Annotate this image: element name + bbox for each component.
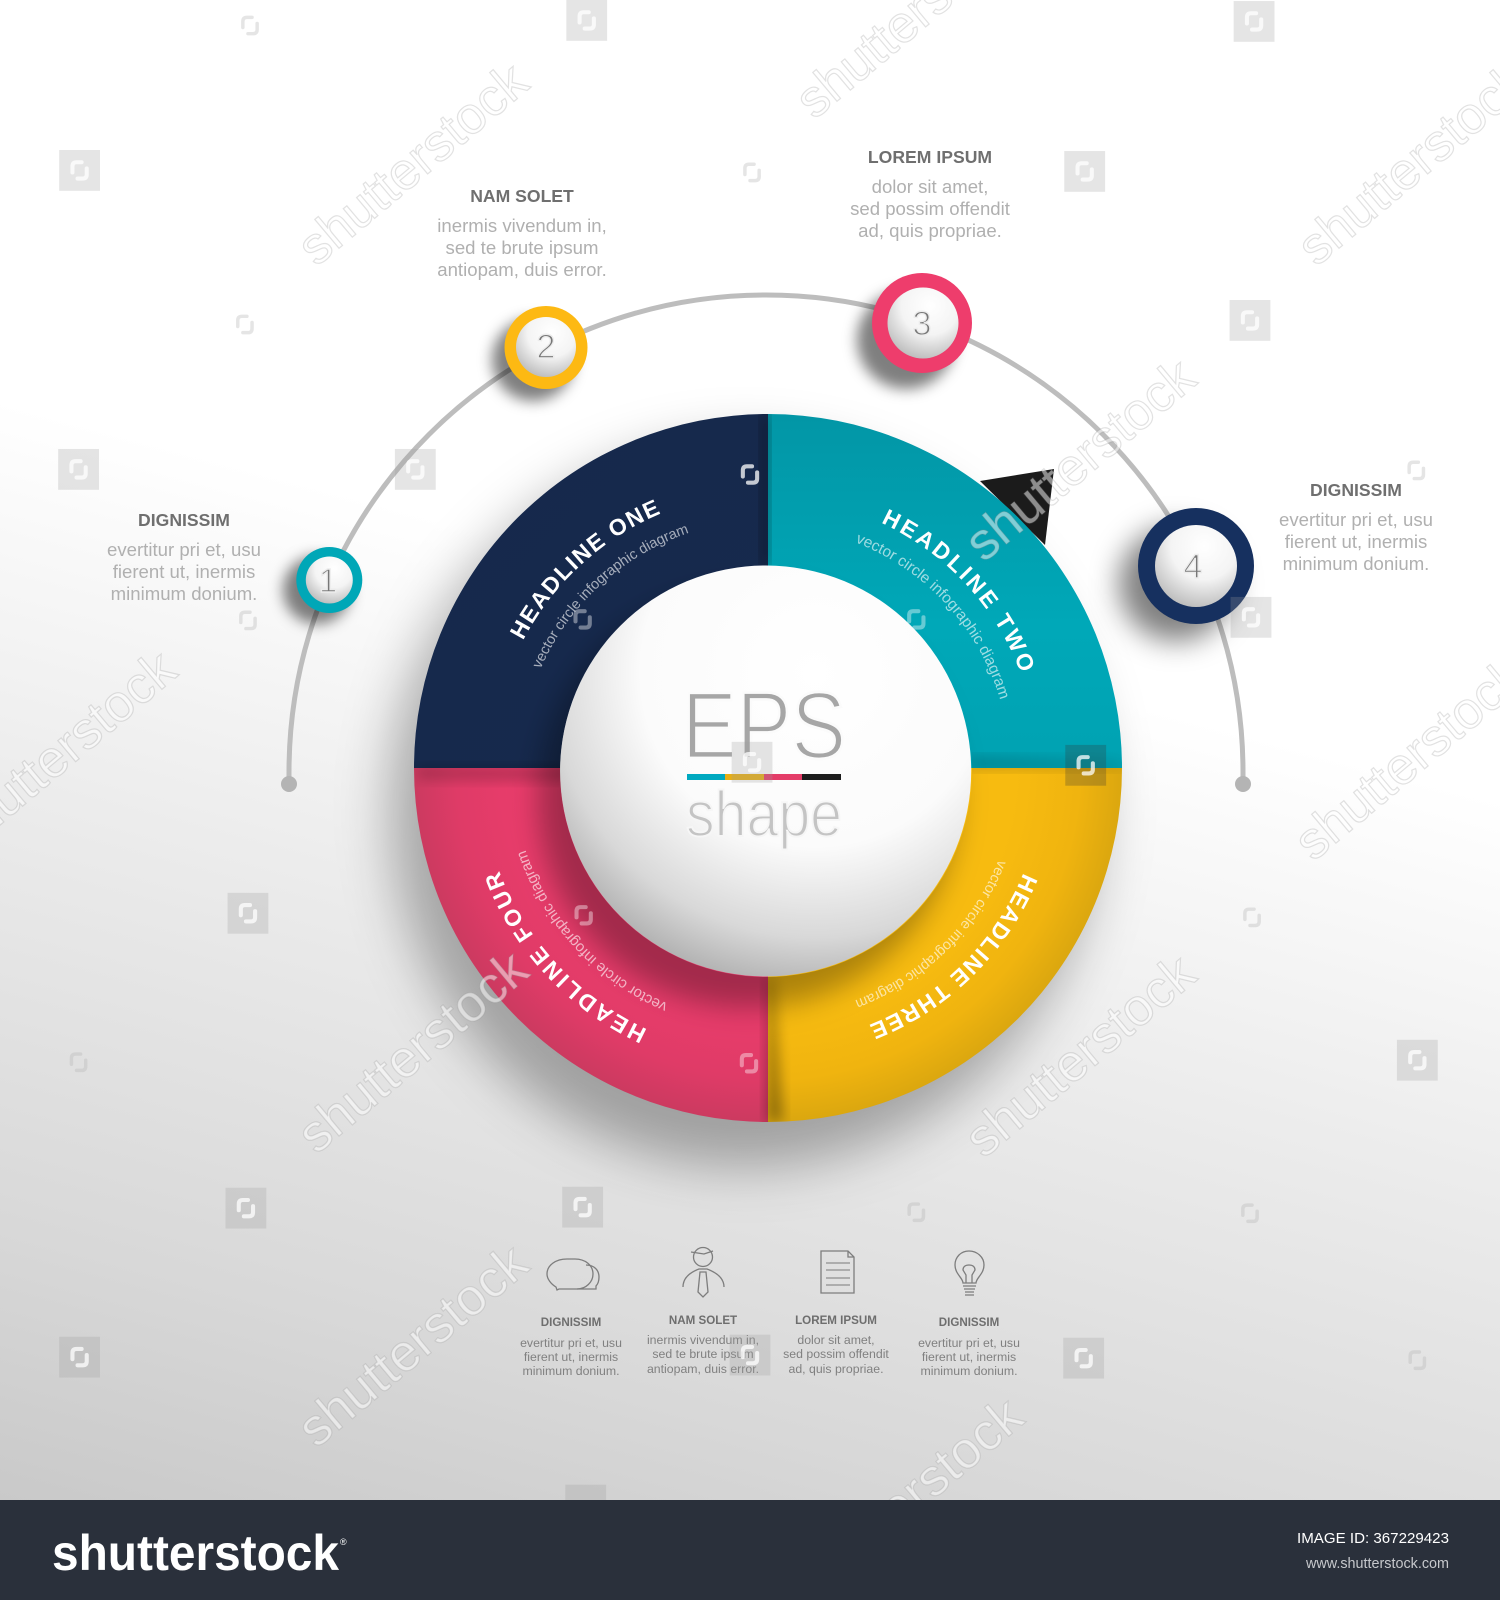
bottom column: person <box>647 1248 759 1376</box>
marker 3 with label: LOREM IPSUM <box>868 147 992 167</box>
marker 1 with label <box>107 510 362 624</box>
bottom column: document: dolor sit amet, <box>797 1333 875 1347</box>
marker 4 with label: evertitur pri et, usu <box>1279 509 1433 530</box>
marker 1 with label: DIGNISSIM <box>138 510 230 530</box>
bottom column: chat: evertitur pri et, usu <box>520 1336 622 1350</box>
icon: person with tie <box>683 1248 724 1297</box>
marker 3 with label: 3 <box>913 305 931 343</box>
footer registered mark: ® <box>340 1537 347 1547</box>
icon: black pointer behind ring <box>980 469 1054 545</box>
headline two: HEADLINE TWO <box>882 509 1034 670</box>
bottom column: idea: fierent ut, inermis <box>922 1350 1016 1364</box>
bottom column: chat: fierent ut, inermis <box>524 1350 618 1364</box>
bottom column: person: antiopam, duis error. <box>647 1362 759 1376</box>
watermark overlay: shutterstock <box>954 943 1207 1168</box>
marker 3 with label <box>850 147 1011 389</box>
watermark overlay: shutterstock <box>954 347 1207 572</box>
marker 4 with label: fierent ut, inermis <box>1285 531 1427 552</box>
bottom column: chat: minimum donium. <box>522 1364 620 1378</box>
marker 2 with label: inermis vivendum in, <box>437 215 607 236</box>
marker 2 with label: sed te brute ipsum <box>446 237 598 258</box>
marker 2 with label: 2 <box>537 328 555 366</box>
bottom column: document: sed possim offendit <box>783 1347 889 1361</box>
headline one: HEADLINE ONE <box>510 500 660 640</box>
segment: teal <box>768 414 1122 768</box>
marker 1 with label: evertitur pri et, usu <box>107 539 261 560</box>
bottom column: document: LOREM IPSUM <box>795 1314 877 1327</box>
icon: speech bubbles <box>547 1259 599 1290</box>
center sphere with EPS shape title <box>560 566 971 976</box>
icon: document <box>821 1251 854 1293</box>
segment: yellow <box>768 768 1122 1122</box>
bottom column: chat <box>520 1259 622 1378</box>
marker 1 with label: 1 <box>319 562 337 599</box>
headline three: vector circle infographic diagram <box>856 862 1006 1007</box>
marker 3 with label: ad, quis propriae. <box>858 220 1002 241</box>
bottom column: person: sed te brute ipsum <box>652 1347 754 1361</box>
bottom column: chat: DIGNISSIM <box>541 1316 601 1329</box>
timeline arc with end dots <box>281 295 1251 792</box>
marker 2 with label: antiopam, duis error. <box>437 259 607 280</box>
color bar <box>687 774 841 780</box>
footer bar <box>0 1500 1500 1600</box>
marker 3 with label: dolor sit amet, <box>872 176 988 197</box>
segment seam shadows <box>414 414 1122 1122</box>
footer image id: IMAGE ID: 367229423 <box>1297 1530 1449 1547</box>
marker 4 with label <box>1119 480 1433 641</box>
bottom column: person: NAM SOLET <box>669 1314 737 1327</box>
bottom column: idea: DIGNISSIM <box>939 1316 999 1329</box>
title: EPS: EPS <box>682 673 846 779</box>
footer url: www.shutterstock.com <box>1305 1555 1449 1572</box>
bottom column: document: ad, quis propriae. <box>788 1362 884 1376</box>
ring drop shadow <box>390 443 1100 1167</box>
headline two: vector circle infographic diagram <box>858 534 1008 699</box>
headline four: HEADLINE FOUR <box>486 871 646 1044</box>
bottom column: document <box>783 1251 889 1376</box>
marker 4 with label: DIGNISSIM <box>1310 480 1402 500</box>
title: shape: shape <box>686 778 842 850</box>
icon: light bulb <box>955 1251 984 1295</box>
bottom column: idea: minimum donium. <box>920 1364 1018 1378</box>
segment: navy <box>414 414 768 768</box>
marker 4 with label: minimum donium. <box>1283 553 1429 574</box>
footer logo: shutterstock <box>52 1525 339 1581</box>
marker 2 with label: NAM SOLET <box>470 186 574 206</box>
marker 4 with label: 4 <box>1184 548 1202 586</box>
bottom column: idea <box>918 1251 1020 1378</box>
segment: pink <box>414 768 768 1122</box>
bottom column: idea: evertitur pri et, usu <box>918 1336 1020 1350</box>
marker 3 with label: sed possim offendit <box>850 198 1011 219</box>
watermark overlay: shutterstock <box>287 939 540 1164</box>
headline three: HEADLINE THREE <box>870 874 1038 1040</box>
marker 2 with label <box>437 186 607 401</box>
marker 1 with label: fierent ut, inermis <box>113 561 255 582</box>
marker 1 with label: minimum donium. <box>111 583 257 604</box>
watermark overlay: shutterstock <box>287 1233 540 1458</box>
bottom column: person: inermis vivendum in, <box>647 1333 759 1347</box>
watermark overlay: shutterstock <box>287 51 540 277</box>
headline four: vector circle infographic diagram <box>518 850 666 1011</box>
circular diagram <box>414 414 1122 1122</box>
headline one: vector circle infographic diagram <box>534 526 688 666</box>
